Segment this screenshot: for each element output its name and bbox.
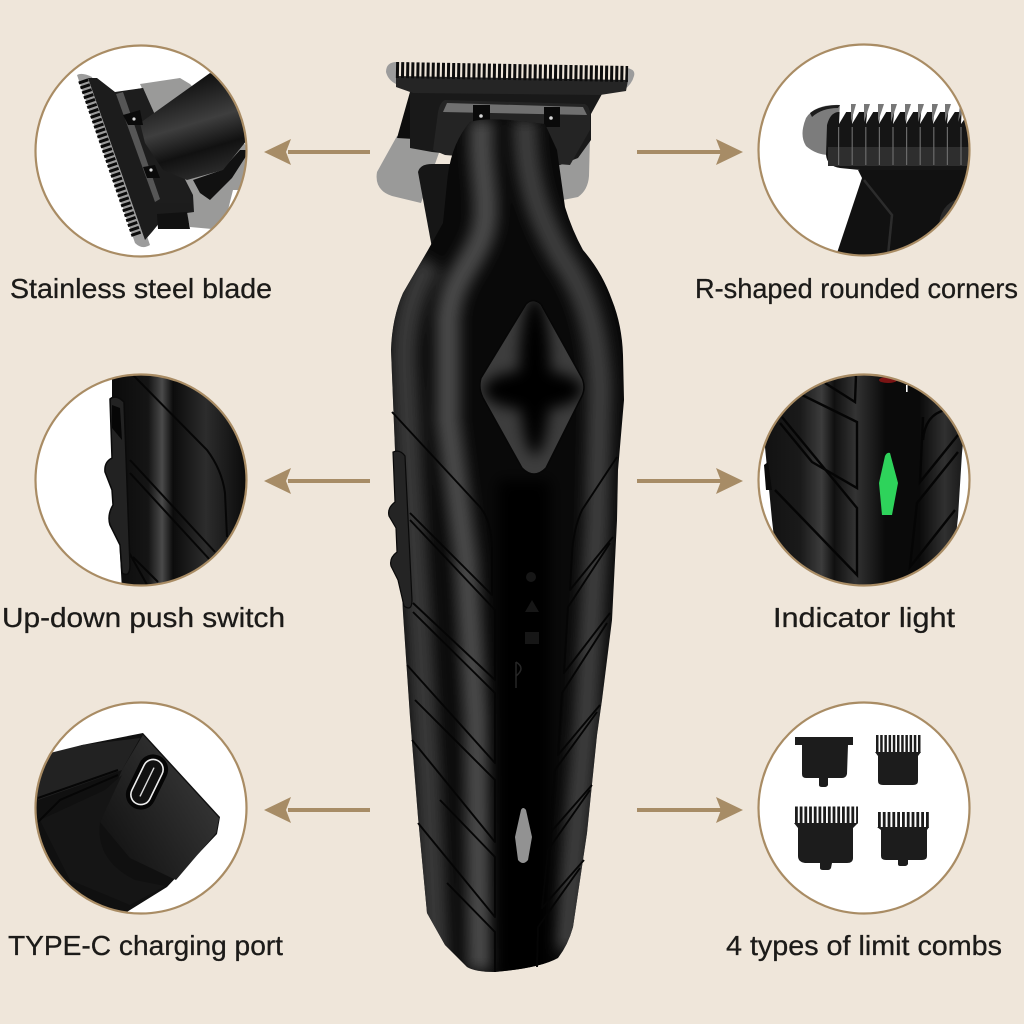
side push switch [389, 451, 412, 608]
rear post [418, 164, 452, 248]
screws [479, 114, 553, 120]
trimmer product photo [377, 62, 640, 980]
handle body [391, 120, 624, 972]
circle: TYPE-C charging port [30, 702, 246, 915]
black rear plate corner [397, 92, 418, 139]
label: 4 types of limit combs: 4 types of limit combs [726, 930, 1002, 961]
circle: up-down push switch [36, 370, 250, 590]
blade guard tips [386, 62, 634, 90]
arrow: blade left [264, 139, 370, 165]
arrow: corners right [637, 139, 743, 165]
label: up-down push switch: Up-down push switch [2, 602, 285, 633]
plate highlight [443, 103, 587, 115]
label: stainless steel blade: Stainless steel blade [10, 273, 272, 304]
circle: indicator light [758, 374, 970, 590]
arrow: light right [637, 468, 743, 494]
status icons [516, 572, 539, 688]
blade teeth [396, 70, 628, 74]
label: TYPE-C charging port: TYPE-C charging port [8, 930, 283, 961]
comb 2 [875, 744, 921, 785]
label: R-shaped rounded corners: R-shaped rounded corners [695, 273, 1018, 304]
grey rear guard plate [377, 136, 590, 203]
right panel grooves [537, 457, 617, 967]
blade top plate [433, 100, 590, 165]
left panel grooves [392, 412, 495, 972]
arrow: port left [264, 797, 370, 823]
body central dark band [498, 480, 550, 980]
arrow: switch left [264, 468, 370, 494]
circle: stainless steel blade [36, 46, 250, 256]
comb 3 [794, 815, 858, 870]
blade rib band [396, 76, 628, 95]
comb 4 [877, 820, 929, 866]
blade head [410, 90, 602, 165]
circle: R-shaped rounded corners [758, 44, 975, 262]
circle: 4 types of limit combs [758, 702, 970, 914]
arrow: combs right [637, 797, 743, 823]
label: indicator light: Indicator light [773, 602, 955, 633]
diamond recess [480, 295, 584, 474]
screw posts [473, 105, 560, 127]
comb 1 [795, 737, 853, 787]
indicator window [515, 808, 532, 863]
body highlights [404, 120, 600, 970]
